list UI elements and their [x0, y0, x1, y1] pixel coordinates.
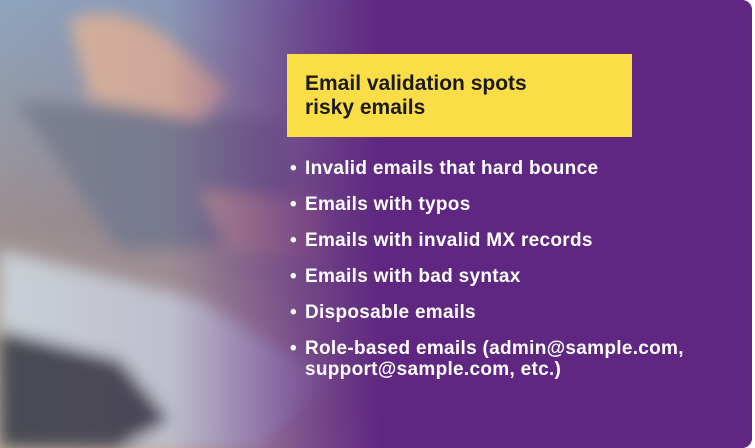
- bullet list: Invalid emails that hard bounce: [305, 158, 598, 179]
- bullet list: support@sample.com, etc.): [305, 359, 561, 380]
- bullet list: Emails with typos: [305, 194, 471, 215]
- bullet list: Emails with bad syntax: [305, 266, 521, 287]
- title box: Email validation spots: [305, 72, 527, 95]
- title box: [287, 54, 632, 137]
- title box: risky emails: [305, 96, 425, 119]
- photo background: [0, 0, 365, 448]
- bullet list: Role-based emails (admin@sample.com,: [305, 338, 684, 359]
- bullet list: [290, 158, 684, 380]
- bullet list: Disposable emails: [305, 302, 476, 323]
- bullet list: Emails with invalid MX records: [305, 230, 593, 251]
